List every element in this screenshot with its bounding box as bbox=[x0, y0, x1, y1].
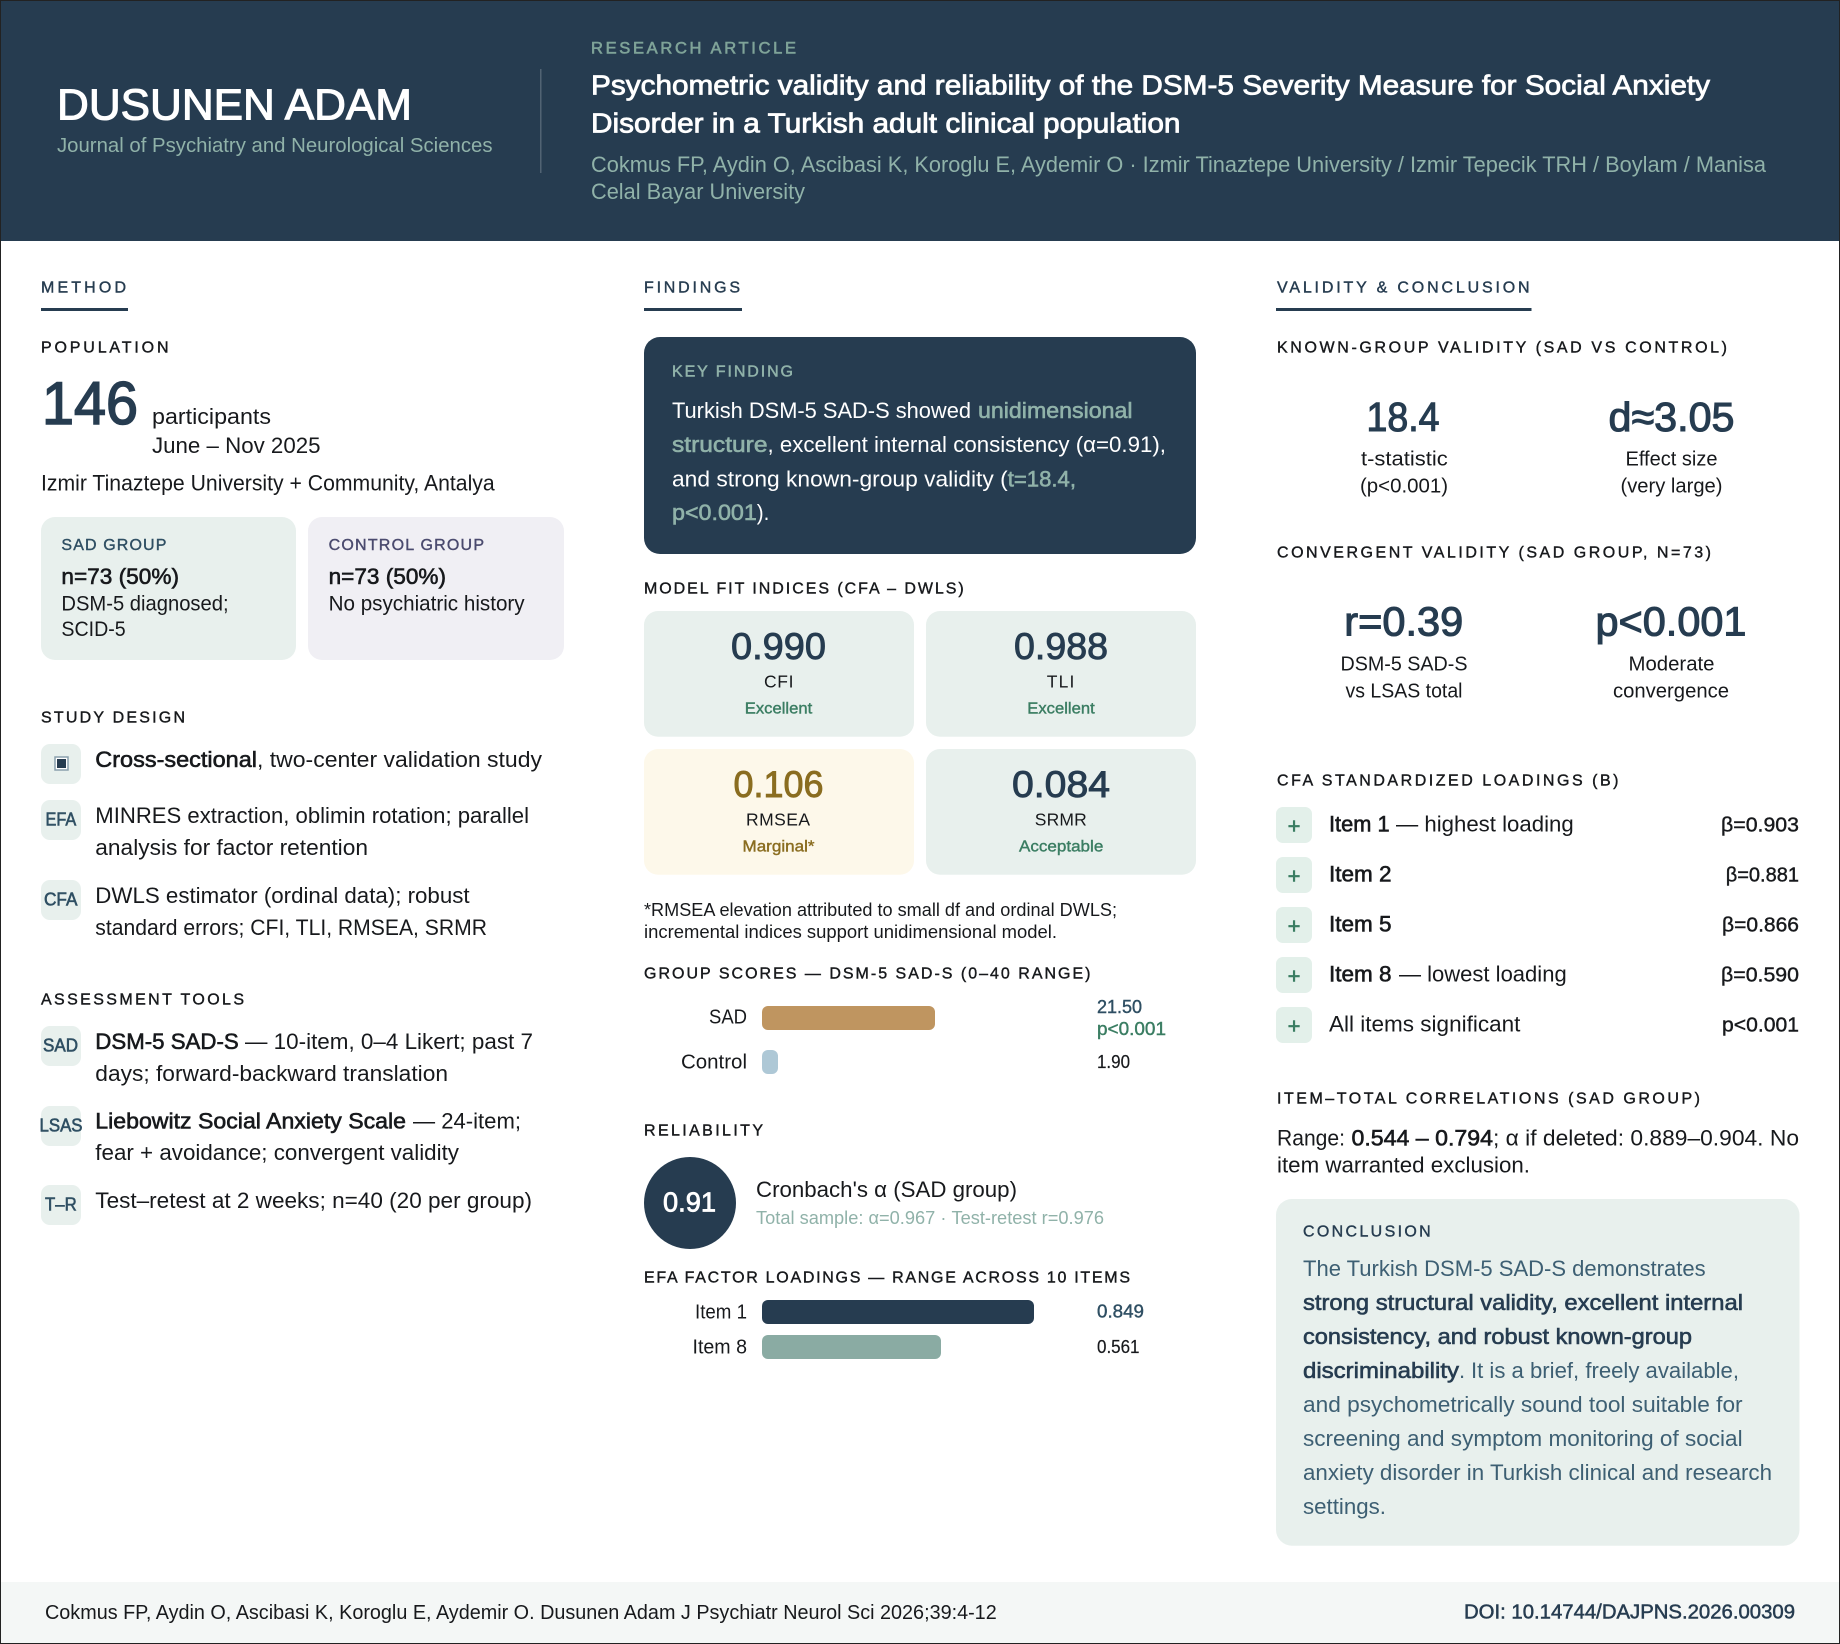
DOI: DOI: 10.14744/DAJPNS.2026.00309 bbox=[1464, 1602, 1795, 1624]
stat: 146 participants: June – Nov 2025 bbox=[152, 433, 320, 458]
callout: conclusion: CONCLUSION bbox=[1303, 1224, 1431, 1241]
row: item 5: β=0.866 bbox=[1722, 914, 1799, 937]
stat card: CFI: 0.990 bbox=[731, 626, 826, 667]
card: SAD group: n=73 (50%) bbox=[61, 564, 179, 589]
item-total text: ; α if deleted: 0.889–0.904. No bbox=[1493, 1126, 1799, 1151]
card: control group: CONTROL GROUP bbox=[329, 537, 484, 554]
item: DSM-5 SAD-S bbox=[41, 1026, 533, 1086]
item: CFA: CFA bbox=[44, 890, 78, 910]
stat: effect size: d≈3.05 bbox=[1608, 394, 1734, 440]
callout: key finding: t=18.4, bbox=[1008, 466, 1076, 492]
item-total text: item warranted exclusion. bbox=[1277, 1153, 1530, 1178]
stat card: RMSEA bbox=[644, 749, 914, 875]
row: item 5: + bbox=[1288, 914, 1300, 938]
panel: findings column bbox=[644, 280, 1196, 1359]
stat: t-statistic: (p<0.001) bbox=[1360, 475, 1448, 498]
authors and affiliations bbox=[591, 152, 1767, 204]
footer bbox=[0, 1582, 1840, 1644]
heading: method: METHOD bbox=[41, 280, 126, 296]
row: item 1: Item 1 bbox=[1329, 812, 1390, 837]
stat card: TLI: Excellent bbox=[1027, 700, 1095, 717]
item: test-retest bbox=[41, 1185, 532, 1225]
callout: conclusion: screening and symptom monitoring of social bbox=[1303, 1426, 1743, 1451]
card: control group: No psychiatric history bbox=[329, 593, 525, 616]
stat card: CFI bbox=[644, 611, 914, 737]
callout: key finding: p<0.001 bbox=[672, 500, 757, 525]
stat: significance: p<0.001 bbox=[1596, 599, 1746, 645]
item: test-retest: Test–retest at 2 weeks; n=40 (20 per group) bbox=[95, 1188, 532, 1213]
card: control group: n=73 (50%) bbox=[329, 564, 446, 589]
footnote: *RMSEA elevation attributed to small df and ordinal DWLS; bbox=[644, 900, 1117, 920]
row: all items: p<0.001 bbox=[1722, 1014, 1799, 1037]
bar chart: group scores: SAD bbox=[709, 1006, 747, 1028]
stat: 146 participants bbox=[42, 370, 320, 458]
article type label: RESEARCH ARTICLE bbox=[591, 40, 796, 58]
stat card: RMSEA: RMSEA bbox=[746, 810, 810, 830]
bar chart: EFA loadings: Item 8 bbox=[692, 1336, 747, 1358]
stat: correlation: vs LSAS total bbox=[1346, 680, 1462, 703]
reliability label: RELIABILITY bbox=[644, 1122, 763, 1140]
authors and affiliations: Celal Bayar University bbox=[591, 179, 805, 204]
stat card: CFI: CFI bbox=[764, 672, 794, 692]
stat card: CFI: Excellent bbox=[745, 700, 813, 717]
EFA loadings label: EFA FACTOR LOADINGS — RANGE ACROSS 10 ITEMS bbox=[644, 1270, 1130, 1287]
item: LSAS: fear + avoidance; convergent validity bbox=[95, 1140, 459, 1165]
callout: conclusion: settings. bbox=[1303, 1494, 1386, 1519]
assessment tools label: ASSESSMENT TOOLS bbox=[41, 992, 244, 1008]
item: LSAS bbox=[40, 1106, 521, 1165]
citation: Cokmus FP, Aydin O, Ascibasi K, Koroglu E, Aydemir O. Dusunen Adam J Psychiatr Neurol Sci 2026;39:4-12 bbox=[45, 1602, 997, 1624]
stat: correlation bbox=[1340, 599, 1468, 703]
callout: key finding bbox=[644, 337, 1196, 554]
row: item 1: — highest loading bbox=[1396, 812, 1574, 837]
stat: significance: Moderate bbox=[1628, 653, 1714, 676]
row: item 2 bbox=[1276, 857, 1799, 893]
heading: findings: FINDINGS bbox=[644, 280, 740, 296]
card: SAD group bbox=[41, 517, 296, 660]
item: DSM-5 SAD-S: SAD bbox=[43, 1036, 78, 1056]
reliability description: Total sample: α=0.967 · Test-retest r=0.976 bbox=[756, 1207, 1104, 1228]
row: item 5: Item 5 bbox=[1329, 912, 1392, 937]
callout: conclusion: consistency, and robust known-group bbox=[1303, 1324, 1692, 1349]
callout: conclusion: strong structural validity, excellent internal bbox=[1303, 1290, 1743, 1315]
heading: method bbox=[41, 280, 128, 311]
card: SAD group: SAD GROUP bbox=[61, 537, 166, 554]
known-group label: KNOWN-GROUP VALIDITY (SAD VS CONTROL) bbox=[1277, 340, 1727, 357]
item: EFA: MINRES extraction, oblimin rotation; parallel bbox=[95, 803, 529, 828]
item-total text bbox=[1277, 1126, 1799, 1178]
journal name: DUSUNEN ADAM bbox=[57, 80, 412, 130]
callout: conclusion: and psychometrically sound tool suitable for bbox=[1303, 1392, 1743, 1417]
item: cross-sectional: , two-center validation study bbox=[257, 747, 542, 772]
row: all items: All items significant bbox=[1329, 1012, 1520, 1037]
group scores label: GROUP SCORES — DSM-5 SAD-S (0–40 RANGE) bbox=[644, 966, 1090, 983]
study design label: STUDY DESIGN bbox=[41, 710, 185, 726]
item: CFA: DWLS estimator (ordinal data); robust bbox=[95, 883, 470, 908]
callout: key finding: unidimensional bbox=[978, 398, 1133, 423]
stat card: SRMR: SRMR bbox=[1035, 810, 1087, 830]
callout: key finding: ). bbox=[757, 500, 769, 525]
recruitment sites: Izmir Tinaztepe University + Community, Antalya bbox=[41, 471, 495, 496]
stat: effect size bbox=[1608, 394, 1734, 498]
callout: key finding: , excellent internal consistency (α=0.91), bbox=[768, 432, 1166, 457]
reliability description: Cronbach's α (SAD group) bbox=[756, 1177, 1017, 1202]
item: DSM-5 SAD-S: — 10-item, 0–4 Likert; past 7 bbox=[245, 1029, 533, 1054]
heading: validity and conclusion bbox=[1276, 280, 1532, 311]
row: item 8: Item 8 bbox=[1329, 962, 1392, 987]
stat: significance: convergence bbox=[1613, 680, 1729, 703]
callout: key finding: structure bbox=[672, 432, 768, 457]
row: item 2: + bbox=[1288, 864, 1300, 888]
authors and affiliations: Cokmus FP, Aydin O, Ascibasi K, Koroglu E, Aydemir O · Izmir Tinaztepe University / Izmir Tepecik TRH / Boylam / Manisa bbox=[591, 152, 1767, 177]
callout: conclusion: anxiety disorder in Turkish clinical and research bbox=[1303, 1460, 1772, 1485]
reliability badge bbox=[644, 1157, 736, 1249]
stat card: SRMR: 0.084 bbox=[1012, 764, 1110, 805]
item: EFA: EFA bbox=[46, 810, 76, 830]
convergent label: CONVERGENT VALIDITY (SAD GROUP, N=73) bbox=[1277, 544, 1711, 562]
item-total label: ITEM–TOTAL CORRELATIONS (SAD GROUP) bbox=[1277, 1091, 1700, 1108]
article title: Psychometric validity and reliability of the DSM-5 Severity Measure for Social Anxiety bbox=[591, 70, 1710, 100]
bar chart: group scores bbox=[681, 996, 1166, 1074]
bar chart: EFA loadings: Item 1 bbox=[695, 1302, 747, 1324]
callout: conclusion: It is a brief, freely available, bbox=[1471, 1358, 1739, 1383]
callout: conclusion: discriminability bbox=[1303, 1358, 1459, 1383]
item: DSM-5 SAD-S: days; forward-backward translation bbox=[95, 1061, 448, 1086]
stat card: TLI: 0.988 bbox=[1014, 626, 1108, 667]
item-total text: Range: bbox=[1277, 1126, 1345, 1151]
heading: validity and conclusion: VALIDITY & CONCLUSION bbox=[1277, 280, 1530, 296]
row: item 1: + bbox=[1288, 814, 1300, 838]
stat: t-statistic bbox=[1360, 394, 1448, 498]
item: DSM-5 SAD-S: DSM-5 SAD-S bbox=[95, 1029, 239, 1054]
item: test-retest: T–R bbox=[45, 1195, 77, 1215]
row: item 8: β=0.590 bbox=[1721, 964, 1799, 987]
item: EFA: analysis for factor retention bbox=[95, 835, 368, 860]
row: item 2: Item 2 bbox=[1329, 862, 1392, 887]
card: control group bbox=[308, 517, 564, 660]
card: SAD group: DSM-5 diagnosed; bbox=[61, 593, 229, 616]
callout: key finding: KEY FINDING bbox=[672, 364, 793, 380]
callout: conclusion bbox=[1276, 1199, 1800, 1546]
row: all items: + bbox=[1288, 1014, 1300, 1038]
stat card: TLI bbox=[926, 611, 1196, 737]
callout: key finding: and strong known-group validity ( bbox=[672, 466, 1008, 492]
panel: method column bbox=[40, 280, 564, 1225]
heading: findings bbox=[644, 280, 742, 311]
model fit label: MODEL FIT INDICES (CFA – DWLS) bbox=[644, 581, 964, 598]
row: item 8: + bbox=[1288, 964, 1300, 988]
item: CFA bbox=[41, 880, 487, 940]
stat card: RMSEA: 0.106 bbox=[734, 764, 824, 805]
population label: POPULATION bbox=[41, 340, 168, 356]
stat: correlation: DSM-5 SAD-S bbox=[1340, 653, 1468, 676]
row: item 1: β=0.903 bbox=[1721, 814, 1799, 837]
article title bbox=[591, 70, 1710, 138]
item: cross-sectional: Cross-sectional bbox=[95, 747, 257, 772]
item: EFA bbox=[41, 800, 529, 860]
footnote: incremental indices support unidimensional model. bbox=[644, 922, 1057, 942]
stat: significance bbox=[1596, 599, 1746, 703]
row: all items bbox=[1276, 1007, 1799, 1043]
stat: effect size: Effect size bbox=[1626, 448, 1718, 471]
callout: conclusion: . bbox=[1459, 1358, 1465, 1383]
bar chart: group scores: 1.90 bbox=[1097, 1051, 1130, 1072]
article title: Disorder in a Turkish adult clinical population bbox=[591, 108, 1180, 138]
item-total text: 0.544 – 0.794 bbox=[1352, 1126, 1493, 1151]
row: item 8: — lowest loading bbox=[1399, 962, 1567, 987]
row: item 8 bbox=[1276, 957, 1799, 993]
bar chart: group scores: Control bbox=[681, 1052, 747, 1074]
bar chart: EFA loadings bbox=[692, 1300, 1144, 1359]
row: item 5 bbox=[1276, 907, 1799, 943]
CFA loadings label: CFA STANDARDIZED LOADINGS (Β) bbox=[1277, 772, 1618, 790]
item: cross-sectional bbox=[41, 744, 542, 784]
stat: 146 participants: participants bbox=[152, 404, 271, 429]
callout: conclusion: The Turkish DSM-5 SAD-S demonstrates bbox=[1303, 1256, 1706, 1281]
stat: correlation: r=0.39 bbox=[1344, 599, 1463, 645]
stat: 146 participants: 146 bbox=[42, 370, 138, 437]
callout: key finding: Turkish DSM-5 SAD-S showed bbox=[672, 398, 971, 423]
panel: validity and conclusion column bbox=[1276, 280, 1800, 1546]
stat: t-statistic: 18.4 bbox=[1366, 394, 1440, 440]
header banner bbox=[0, 0, 1840, 241]
stat: effect size: (very large) bbox=[1620, 475, 1722, 498]
row: item 2: β=0.881 bbox=[1726, 864, 1799, 887]
item: CFA: standard errors; CFI, TLI, RMSEA, SRMR bbox=[95, 915, 487, 940]
reliability badge: 0.91 bbox=[663, 1186, 716, 1218]
item: LSAS: Liebowitz Social Anxiety Scale bbox=[95, 1109, 406, 1134]
stat card: RMSEA: Marginal* bbox=[742, 838, 814, 855]
stat card: TLI: TLI bbox=[1047, 672, 1074, 692]
item: LSAS: — 24-item; bbox=[413, 1109, 521, 1134]
stat: t-statistic: t-statistic bbox=[1361, 448, 1448, 471]
reliability description bbox=[756, 1177, 1104, 1228]
stat card: SRMR: Acceptable bbox=[1019, 838, 1103, 855]
bar chart: EFA loadings: 0.561 bbox=[1097, 1336, 1140, 1357]
journal subtitle: Journal of Psychiatry and Neurological Sciences bbox=[57, 134, 492, 157]
card: SAD group: SCID-5 bbox=[61, 618, 126, 641]
stat card: SRMR bbox=[926, 749, 1196, 875]
bar chart: group scores: p<0.001 bbox=[1097, 1018, 1166, 1039]
bar chart: EFA loadings: 0.849 bbox=[1097, 1301, 1144, 1322]
footnote bbox=[644, 900, 1117, 942]
row: item 1 bbox=[1276, 807, 1799, 843]
bar chart: group scores: 21.50 bbox=[1097, 996, 1142, 1017]
item: LSAS: LSAS bbox=[40, 1116, 82, 1136]
